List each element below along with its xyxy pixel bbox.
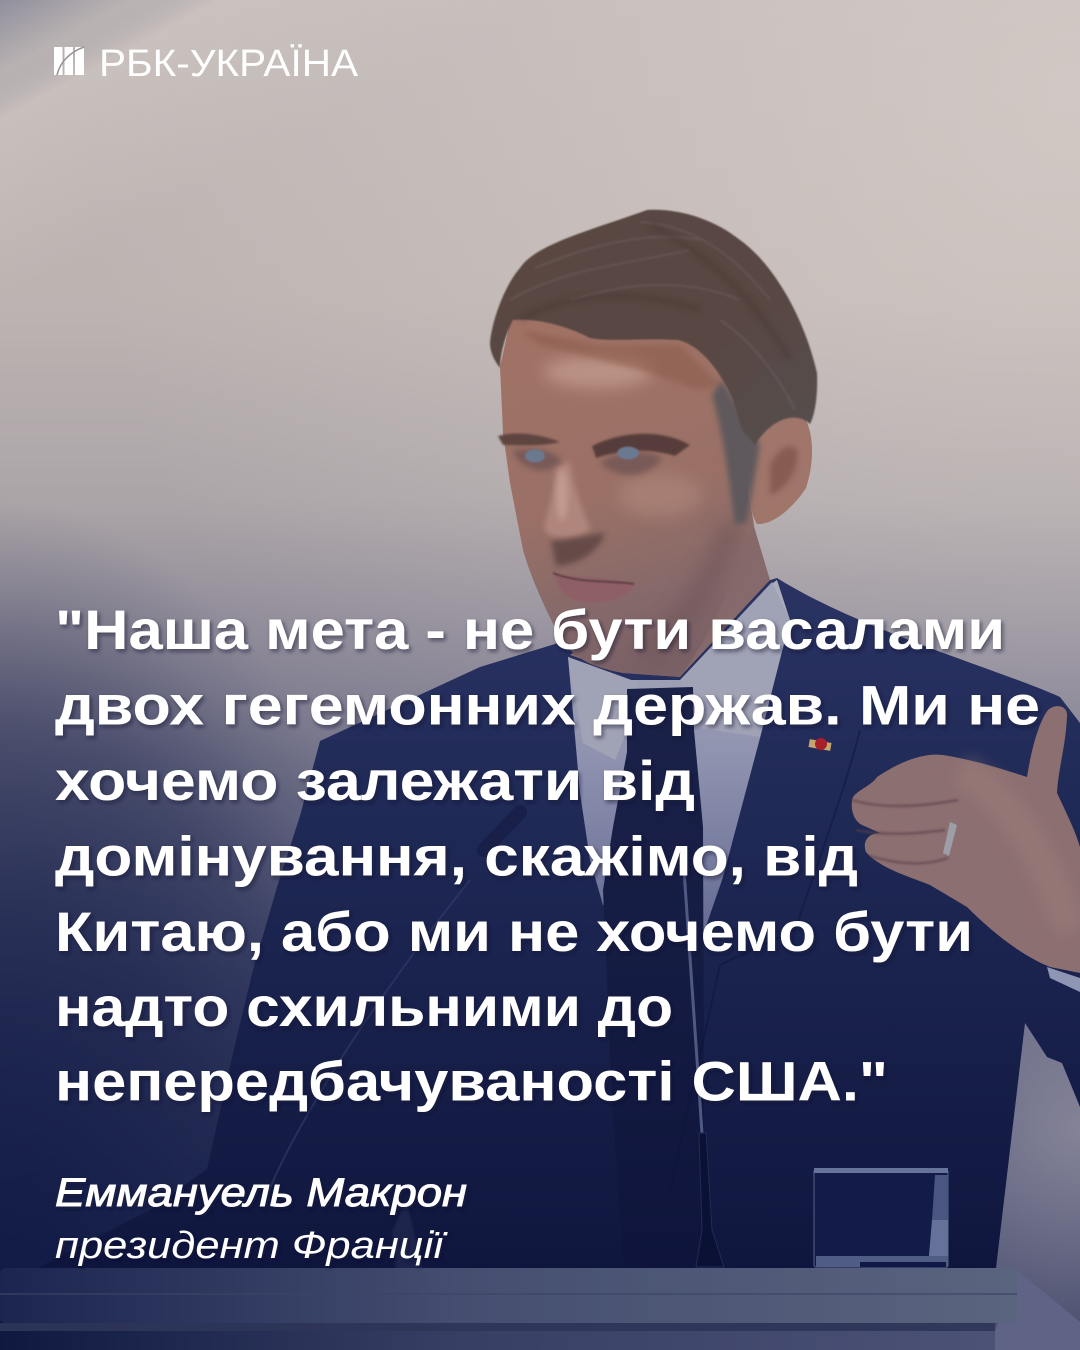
neck — [570, 520, 770, 677]
eyebrow right — [592, 434, 690, 458]
lip line — [553, 573, 634, 584]
quote text: хочемо залежати від — [55, 749, 695, 812]
forehead hairline tan — [520, 330, 720, 390]
wedge between arm and torso — [392, 1200, 424, 1272]
left eye — [525, 450, 545, 462]
shirt cuff — [1047, 967, 1080, 992]
sideburn — [712, 380, 760, 525]
quote text: "Наша мета - не бути васалами — [55, 598, 1005, 661]
speaker name: Еммануель Макрон — [55, 1171, 467, 1215]
quote text: домінування, скажімо, від — [55, 824, 858, 888]
wedding ring — [943, 822, 957, 856]
eyebrow left — [498, 434, 560, 445]
tie — [603, 687, 706, 1268]
quote text: непередбачуваності США." — [55, 1050, 888, 1112]
lectern — [0, 1268, 1080, 1350]
nose highlight — [556, 469, 568, 521]
jaw shadow — [625, 520, 745, 665]
logo wordmark: РБК-УКРАЇНА — [99, 43, 359, 85]
quote text: двох гегемонних держав. Ми не — [55, 674, 1040, 736]
hand — [852, 706, 1080, 992]
nose shadow — [551, 533, 605, 566]
water glass — [814, 1168, 948, 1267]
speaker role: президент Франції — [55, 1225, 448, 1267]
forehead highlight — [543, 356, 653, 388]
attribution — [55, 1171, 467, 1267]
right eye — [617, 446, 639, 460]
jacket lapel seam — [670, 730, 860, 1190]
head — [490, 210, 817, 677]
logo icon — [54, 47, 84, 75]
lapel pin — [808, 738, 832, 751]
collar — [568, 582, 790, 760]
nose bridge — [544, 462, 590, 539]
lips — [553, 573, 634, 602]
logo: РБК-Україна — [54, 43, 359, 85]
eye sockets — [512, 449, 662, 475]
microphone left — [265, 880, 470, 1200]
quote text: надто схильними до — [55, 975, 673, 1038]
quote text: Китаю, або ми не хочемо бути — [55, 900, 973, 963]
ear — [749, 406, 812, 524]
cheek highlight — [618, 473, 702, 517]
face — [500, 300, 754, 677]
microphone centre — [684, 870, 724, 1267]
suit jacket — [37, 578, 1080, 1268]
quote text — [55, 598, 1040, 1112]
microphone head — [484, 812, 520, 850]
shirt — [568, 580, 790, 935]
hair — [490, 210, 817, 445]
hair strands — [510, 222, 795, 410]
